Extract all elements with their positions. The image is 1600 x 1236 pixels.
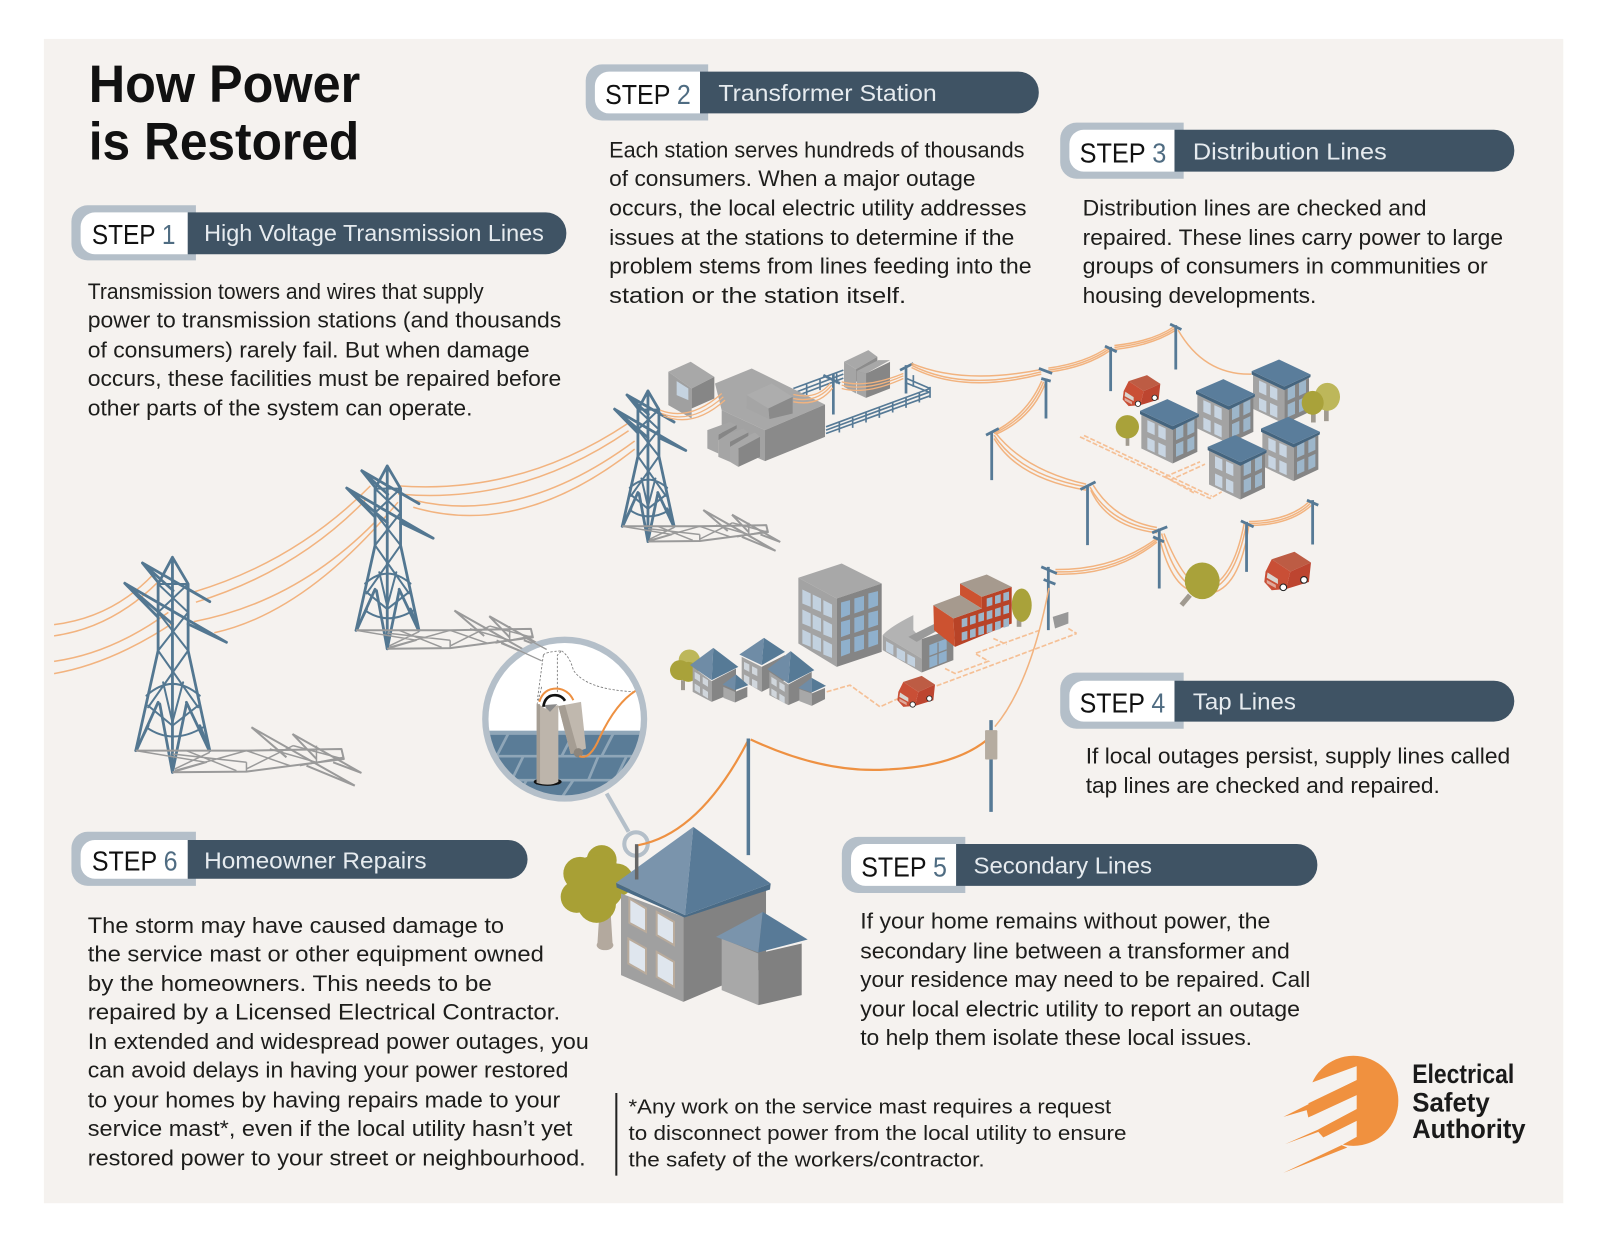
step 6 text: the service mast or other equipment owned	[88, 941, 544, 966]
step 2 text: station or the station itself.	[609, 283, 906, 308]
fallen tower 3	[622, 510, 780, 551]
step 5 text: secondary line between a transformer and	[860, 938, 1290, 963]
step 4 text	[1086, 743, 1510, 798]
tree on line	[1181, 563, 1220, 605]
step 1 badge: High Voltage Transmission Lines	[204, 220, 544, 246]
step 3 text: groups of consumers in communities or	[1083, 254, 1488, 279]
step 5 text: to help them isolate these local issues.	[860, 1025, 1252, 1050]
step 3 text	[1083, 195, 1503, 308]
truck 1	[1123, 375, 1160, 406]
step 3 badge: Distribution Lines	[1193, 138, 1387, 164]
step 5 badge: STEP 5	[861, 852, 947, 883]
distribution poles and wires	[911, 324, 1318, 630]
step 1 text: occurs, these facilities must be repaired before	[88, 366, 561, 391]
step 2 text: Each station serves hundreds of thousands	[609, 137, 1025, 162]
footnote: the safety of the workers/contractor.	[629, 1149, 985, 1171]
footnote: to disconnect power from the local utility to ensure	[629, 1123, 1127, 1145]
step 6 text	[88, 913, 589, 1170]
low grey building	[883, 615, 953, 672]
feeder line to transformer	[995, 588, 1049, 727]
transformer station	[660, 350, 930, 467]
grey office tower	[798, 563, 882, 667]
step 2 badge: STEP 2	[605, 79, 691, 110]
step 5 text: your local electric utility to report an outage	[860, 996, 1300, 1021]
apartment block with dashed supply lines	[1080, 359, 1340, 499]
magnifier circle: broken service mast	[480, 637, 653, 811]
dashed supply lines	[827, 628, 1077, 707]
truck 2	[1264, 552, 1311, 591]
footnote	[615, 1093, 1127, 1176]
step 2 text: of consumers. When a major outage	[609, 166, 976, 191]
step 6 text: to your homes by having repairs made to your	[88, 1087, 560, 1112]
transmission tower 3	[615, 391, 686, 541]
step 6 text: by the homeowners. This needs to be	[88, 971, 492, 996]
secondary line	[638, 720, 997, 855]
small houses	[690, 638, 826, 706]
step 6 badge: Homeowner Repairs	[204, 848, 427, 874]
step 6 text: restored power to your street or neighbourhood.	[88, 1145, 586, 1170]
title: is Restored	[89, 112, 359, 171]
transmission tower 2	[347, 466, 433, 649]
fallen tower 2	[356, 610, 548, 660]
step 6 text: service mast*, even if the local utility hasn’t yet	[88, 1116, 572, 1141]
step 6 text: repaired by a Licensed Electrical Contractor.	[88, 1000, 560, 1025]
title: How Power	[89, 55, 360, 114]
house and secondary line	[561, 720, 997, 1005]
red building	[933, 574, 1012, 647]
step 1 badge	[71, 205, 566, 260]
logo: Electrical Safety Authority: Electrical	[1412, 1059, 1514, 1089]
transmission tower 1	[125, 557, 226, 772]
step 1 text: power to transmission stations (and thousands	[88, 308, 561, 333]
step 6 badge: STEP 6	[92, 846, 178, 877]
truck 3	[897, 676, 935, 707]
step 6 text: can avoid delays in having your power restored	[88, 1058, 568, 1083]
step 6 text: The storm may have caused damage to	[88, 913, 504, 938]
step 3 text: repaired. These lines carry power to large	[1083, 225, 1503, 250]
step 1 text: other parts of the system can operate.	[88, 395, 472, 420]
step 5 badge	[842, 837, 1317, 893]
step 4 badge: Tap Lines	[1193, 688, 1296, 714]
tree by houses	[670, 649, 700, 690]
title	[89, 55, 360, 171]
logo: Electrical Safety Authority: Safety	[1412, 1087, 1490, 1117]
step 1 text: of consumers) rarely fail. But when damage	[88, 337, 530, 362]
step 6 badge	[71, 832, 528, 886]
step 2 badge	[586, 64, 1039, 121]
step 3 badge	[1060, 123, 1514, 179]
step 5 text	[860, 909, 1310, 1050]
step 4 badge: STEP 4	[1080, 687, 1165, 718]
transmission wires	[54, 424, 635, 674]
step 4 text: tap lines are checked and repaired.	[1086, 773, 1440, 798]
logo: Electrical Safety Authority	[1283, 1056, 1526, 1173]
footnote: *Any work on the service mast requires a request	[629, 1096, 1112, 1118]
step 2 badge: Transformer Station	[718, 80, 937, 106]
network illustration	[911, 324, 1318, 630]
tree behind red building	[1012, 588, 1032, 627]
step 2 text	[609, 137, 1032, 308]
step 5 text: If your home remains without power, the	[860, 909, 1270, 934]
tree	[561, 845, 633, 950]
step 1 badge: STEP 1	[92, 219, 176, 250]
step 2 text: problem stems from lines feeding into the	[609, 254, 1032, 279]
step 4 badge	[1060, 673, 1514, 729]
magnifier connector	[607, 794, 648, 856]
step 3 text: Distribution lines are checked and	[1083, 195, 1427, 220]
step 6 text: In extended and widespread power outages, you	[88, 1029, 589, 1054]
box on pole	[1053, 612, 1068, 628]
house	[616, 827, 808, 1005]
step 1 text	[88, 279, 561, 420]
step 4 text: If local outages persist, supply lines called	[1086, 743, 1510, 768]
step 5 text: your residence may need to be repaired. Call	[860, 967, 1310, 992]
logo: Electrical Safety Authority: Authority	[1412, 1114, 1526, 1144]
step 3 text: housing developments.	[1083, 283, 1316, 308]
step 5 badge: Secondary Lines	[973, 853, 1152, 879]
step 3 badge: STEP 3	[1080, 137, 1166, 168]
step 1 text: Transmission towers and wires that supply	[88, 279, 484, 304]
fallen tower 1	[136, 727, 361, 786]
step 2 text: issues at the stations to determine if the	[609, 225, 1014, 250]
step 2 text: occurs, the local electric utility addresses	[609, 195, 1027, 220]
lower town	[670, 563, 1077, 707]
